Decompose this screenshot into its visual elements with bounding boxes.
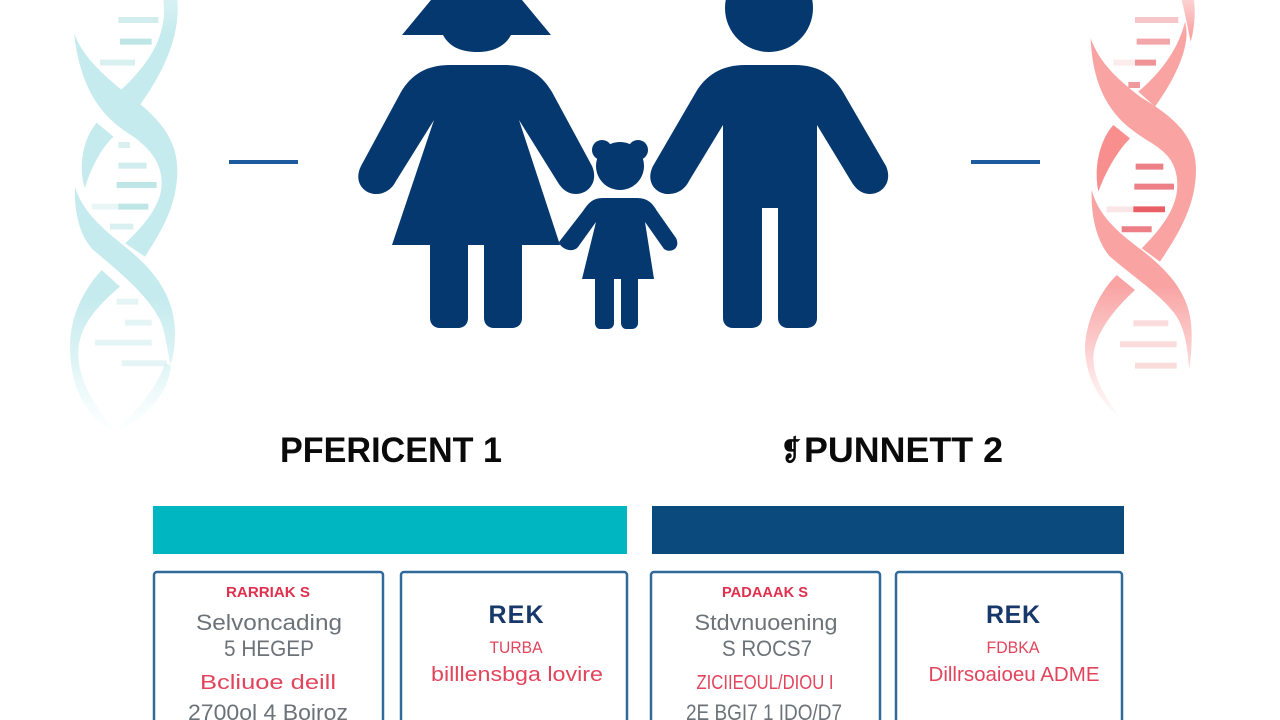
header bar: navy — [652, 506, 1124, 554]
card 2 title: REK — [488, 601, 544, 629]
panel: card 3 — [651, 572, 880, 720]
panel: card 1 — [154, 572, 383, 720]
card 1 label: RARRIAK S — [226, 584, 310, 601]
card 2 label: TURBA — [490, 638, 543, 657]
card 4 label: FDBKA — [986, 638, 1040, 657]
icon: red DNA helix — [1085, 0, 1196, 417]
card 1 line: Selvoncading — [196, 610, 342, 635]
icon: family silhouette — [358, 0, 888, 329]
heading: parent 2 — [781, 431, 1003, 470]
card 3 red line: ZICIIEOUL/DIOU I — [696, 672, 834, 694]
header bar: teal — [153, 506, 627, 554]
divider dash right — [971, 160, 1040, 164]
card 3 line: Stdvnuoening — [694, 610, 838, 635]
card 4 title: REK — [986, 601, 1040, 629]
heading: parent 1: PFERICENT 1 — [280, 431, 502, 470]
panel: card 2 — [401, 572, 627, 720]
heading text: PUNNETT 2 — [804, 431, 1003, 470]
icon: father — [650, 0, 888, 328]
panel: card 4 — [896, 572, 1122, 720]
divider dash left — [229, 160, 298, 164]
card 3 code: S ROCS7 — [722, 636, 812, 661]
card 1 red line: Bcliuoe deill — [200, 672, 336, 694]
icon: teal DNA helix — [70, 0, 178, 433]
card 1 code: 5 HEGEP — [224, 636, 314, 661]
icon: child — [559, 140, 677, 329]
icon: mother — [358, 0, 594, 328]
card 2 line: billlensbga lovire — [431, 664, 603, 686]
heading glyph: ❡ — [781, 435, 801, 466]
card 4 line: Dillrsoaioeu ADME — [928, 664, 1100, 686]
card 3 label: PADAAAK S — [722, 584, 808, 601]
